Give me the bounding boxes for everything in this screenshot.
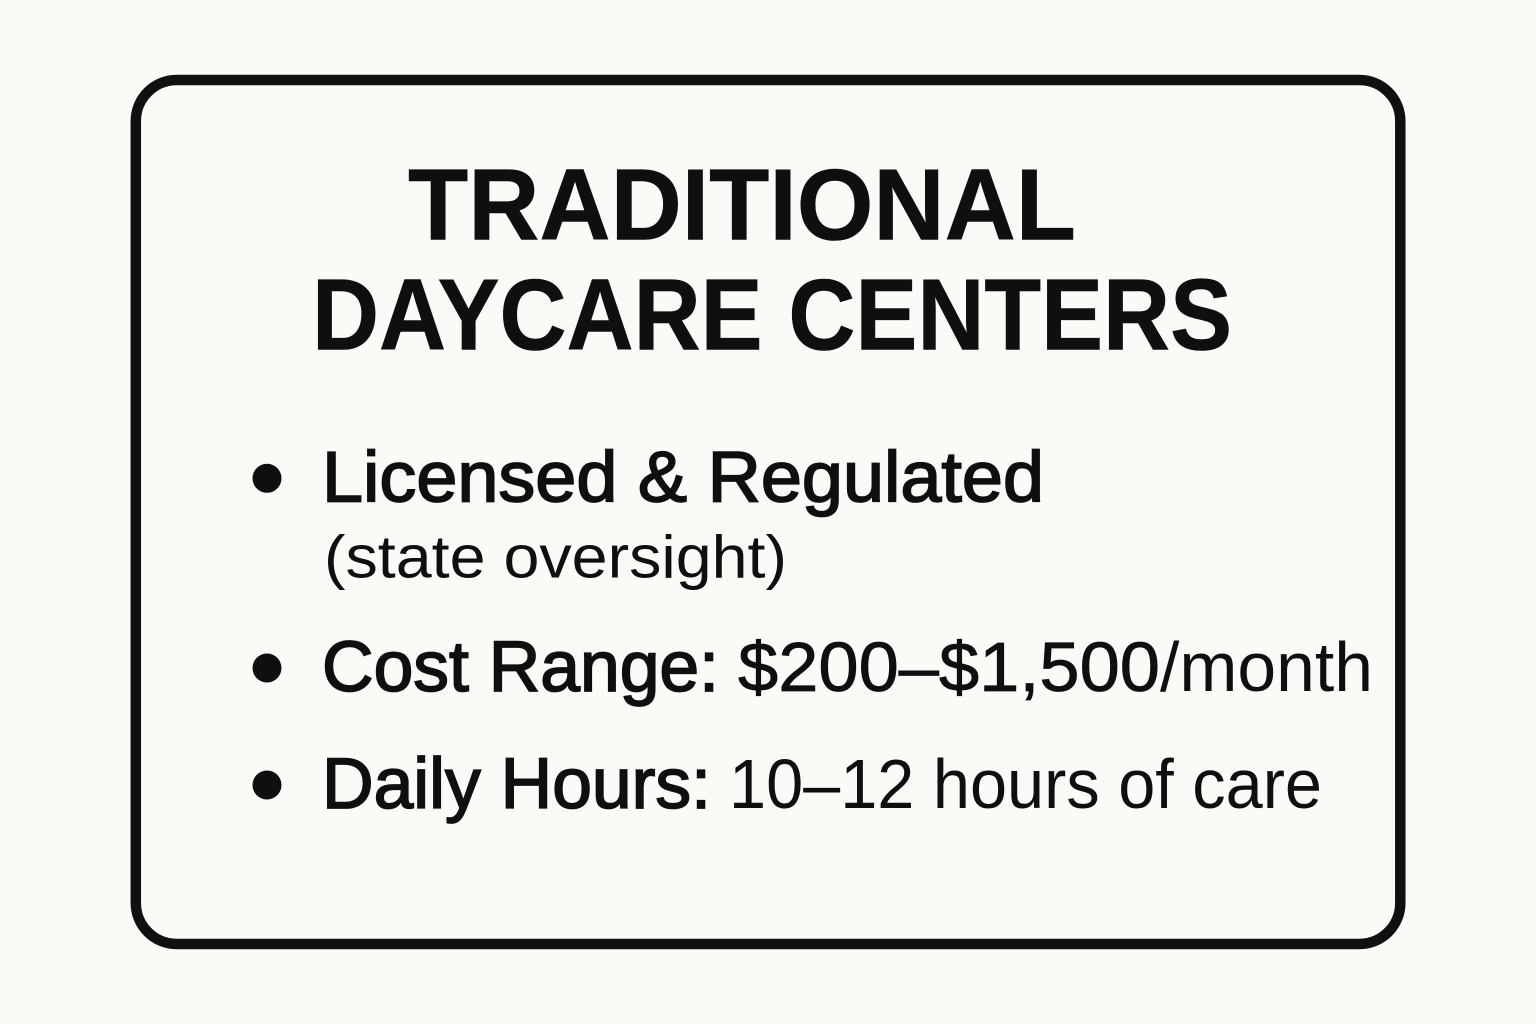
bullet: licensing: [252, 464, 282, 493]
value: hours of care: 10–12 hours of care: [729, 745, 1322, 823]
panel: daycare summary card: [136, 80, 1400, 944]
bullet: cost range: [252, 654, 282, 682]
list item: daily hours: [252, 745, 1322, 824]
text: licensed and regulated: Licensed & Regulated: [322, 438, 1044, 518]
list item: cost range: [252, 628, 1373, 707]
title: DAYCARE CENTERS: [312, 260, 1232, 372]
title: [312, 150, 1232, 372]
title: TRADITIONAL: [408, 150, 1076, 262]
label: daily hours: Daily Hours:: [322, 745, 711, 824]
value: dollar range: $200–$1,500: [738, 628, 1160, 706]
unit: per month: /month: [1160, 628, 1373, 706]
text: state oversight: (state oversight): [324, 524, 787, 590]
bullet: daily hours: [252, 770, 282, 800]
label: cost range: Cost Range:: [322, 628, 719, 707]
list item: licensing: [252, 438, 1044, 590]
